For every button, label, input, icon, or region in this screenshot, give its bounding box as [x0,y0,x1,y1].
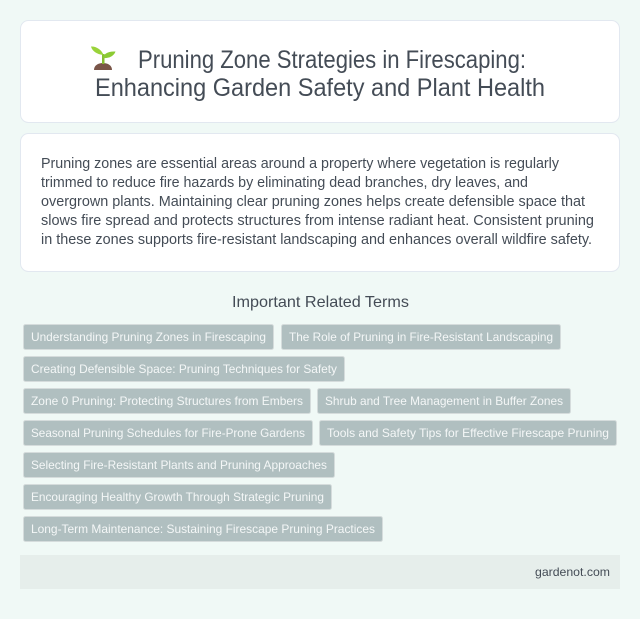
tag: Tools and Safety Tips for Effective Firescape Pruning [327,426,609,440]
tag [320,420,616,446]
icon: seedling [91,46,116,70]
panel: description [20,134,620,272]
tag [24,388,310,414]
tag [24,484,332,510]
text block: description: trimmed to reduce fire hazards by eliminating dead branches, dry leaves, and [41,175,528,191]
tag [24,356,344,382]
tag: The Role of Pruning in Fire-Resistant Landscaping [289,330,553,344]
panel: title card [20,20,620,122]
tag: Creating Defensible Space: Pruning Techniques for Safety [31,362,337,376]
tag [24,420,312,446]
text block: description: slows fire spread and protects structures from intense radiant heat. Consistent pruning [41,213,594,229]
tag list [24,324,616,542]
heading: related terms: Important Related Terms [232,294,409,311]
title: Pruning Zone Strategies in Firescaping: [138,46,526,74]
text block: description: overgrown plants. Maintaining clear pruning zones helps create defensible space that [41,194,585,210]
tag: Seasonal Pruning Schedules for Fire-Prone Gardens [31,426,305,440]
tag [318,388,570,414]
footer [20,555,620,589]
text block: description: Pruning zones are essential areas around a property where vegetation is regularly [41,156,560,172]
tag: Zone 0 Pruning: Protecting Structures from Embers [31,394,303,408]
tag: Encouraging Healthy Growth Through Strategic Pruning [31,490,324,504]
tag [282,324,560,350]
title: Enhancing Garden Safety and Plant Health [95,74,545,102]
text block: description [41,156,594,248]
tag [24,452,334,478]
tag: Selecting Fire-Resistant Plants and Pruning Approaches [31,458,327,472]
tag: Shrub and Tree Management in Buffer Zones [325,394,563,408]
tag [24,516,382,542]
text block: description: in these zones supports fire-resistant landscaping and enhances overall wildfire safety. [41,232,592,248]
tag: Long-Term Maintenance: Sustaining Firescape Pruning Practices [31,522,375,536]
footer: gardenot.com [535,565,610,579]
tag: Understanding Pruning Zones in Firescaping [31,330,266,344]
tag [24,324,274,350]
title [95,46,545,102]
